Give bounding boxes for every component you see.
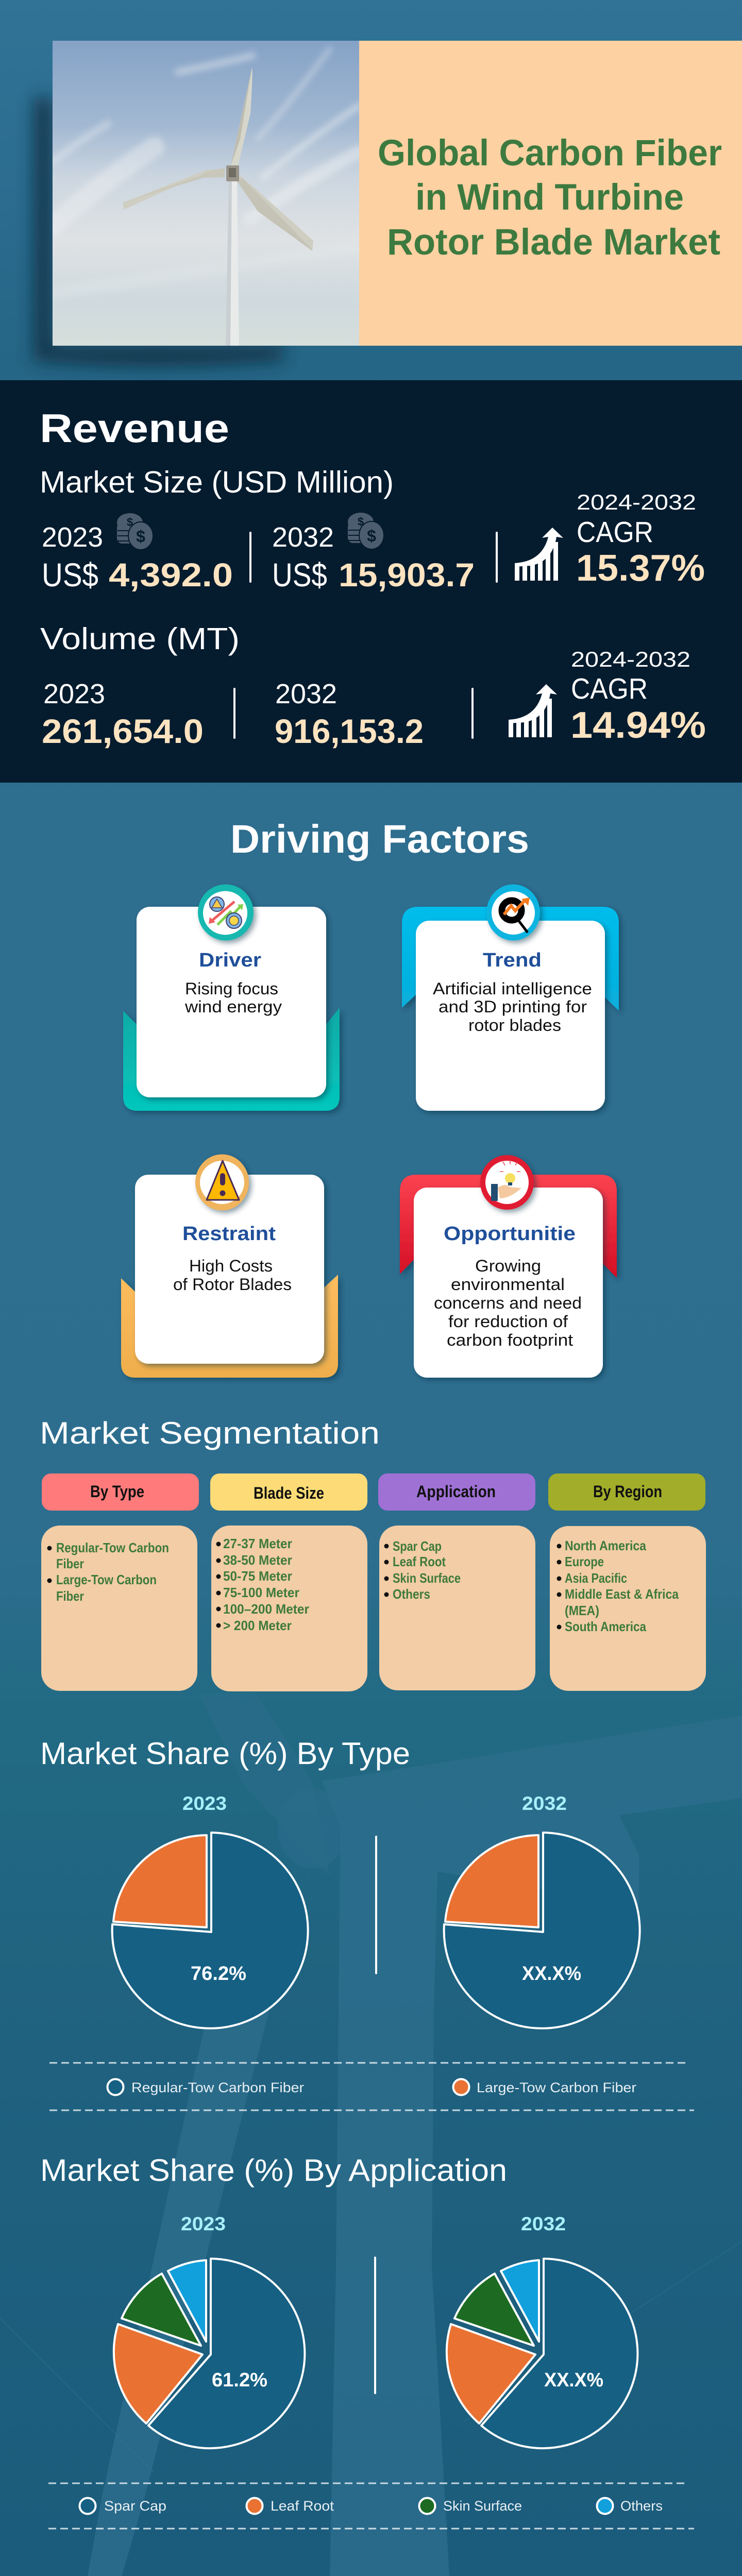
heading: Driving Factors: Driving Factors	[230, 817, 529, 861]
description	[433, 979, 592, 1035]
hero photo: wind turbine against sky	[53, 41, 359, 346]
metric: 2023 market size: US$	[42, 556, 98, 594]
heading: Market Share By Type: Market Share (%) By Type	[40, 1736, 410, 1771]
description: rotor blades	[468, 1016, 561, 1035]
description: carbon footprint	[447, 1331, 573, 1349]
list: region: South America	[565, 1619, 646, 1634]
list: region: Middle East & Africa	[565, 1586, 679, 1602]
segment: Blade Size	[210, 1473, 367, 1691]
label: Opportunitie	[444, 1223, 576, 1245]
description: concerns and need	[434, 1294, 582, 1312]
chart: type share 2023: 76.2%	[191, 1963, 246, 1985]
icon: magnifier with trend arrow	[486, 884, 540, 941]
description: and 3D printing for	[439, 997, 587, 1016]
chart: application share 2023	[114, 2213, 305, 2448]
description: wind energy	[184, 997, 282, 1016]
description: environmental	[451, 1275, 565, 1294]
chart: type share 2032: 2032	[522, 1793, 567, 1814]
list: blade size	[211, 1526, 367, 1691]
card: restraint	[121, 1154, 338, 1378]
heading: Market Size: Market Size (USD Million)	[40, 465, 394, 499]
title: Global Carbon Fiber	[378, 133, 722, 174]
metric: volume CAGR	[570, 647, 706, 746]
icon: growth chart	[515, 528, 563, 581]
description: High Costs	[189, 1257, 273, 1275]
title	[378, 133, 722, 263]
title: Rotor Blade Market	[387, 222, 720, 263]
description	[184, 979, 282, 1016]
list: region	[550, 1526, 706, 1691]
segment: Application	[378, 1473, 535, 1690]
metric: 2032 volume	[275, 679, 424, 750]
metric: revenue CAGR: 2024-2032	[577, 490, 696, 514]
segment: Application: Application	[416, 1482, 496, 1501]
heading: Market Share By Application: Market Share (%) By Application	[40, 2153, 507, 2188]
list: type: Regular-Tow Carbon	[56, 1540, 169, 1555]
icon: coins 2023: $	[136, 527, 145, 546]
metric: volume CAGR: 14.94%	[570, 705, 706, 746]
description: of Rotor Blades	[173, 1275, 292, 1294]
metric: revenue CAGR: CAGR	[577, 516, 653, 549]
list: type: Fiber	[56, 1588, 84, 1604]
list: application: Others	[393, 1586, 430, 1602]
card: trend	[402, 884, 619, 1111]
icon: bulb and hand	[480, 1155, 534, 1210]
icon: coins 2023	[117, 513, 153, 550]
metric: revenue CAGR: 15.37%	[576, 548, 705, 589]
chart: application share 2032: 2032	[521, 2213, 566, 2234]
chart: application share 2023: 2023	[181, 2213, 226, 2234]
list: application: Skin Surface	[393, 1570, 461, 1586]
heading: Revenue: Revenue	[40, 405, 229, 451]
chart: application share 2032: XX.X%	[544, 2369, 603, 2391]
description: Rising focus	[185, 979, 278, 998]
metric: revenue CAGR	[576, 490, 705, 589]
segment: By Region	[548, 1473, 706, 1691]
metric: 2023 volume	[42, 679, 204, 750]
list: region: (MEA)	[565, 1603, 599, 1618]
metric: 2023 market size	[42, 522, 233, 594]
panel: revenue	[0, 380, 742, 783]
icon: driver gears and arrows	[198, 884, 254, 941]
card: opportunities	[400, 1155, 617, 1378]
icon: coins 2032: $	[358, 515, 364, 528]
icon: coins 2032: $	[367, 527, 376, 545]
list: application: Leaf Root	[393, 1554, 446, 1569]
list: type	[41, 1526, 197, 1691]
chart: type share 2032: XX.X%	[522, 1963, 581, 1985]
list: region: Asia Pacific	[565, 1570, 627, 1586]
description	[434, 1257, 582, 1349]
metric: 2032 market size: US$	[272, 556, 327, 594]
list: type: Fiber	[56, 1556, 84, 1571]
icon: growth chart volume	[509, 684, 557, 737]
icon: coins 2032	[348, 513, 384, 549]
legend: type	[107, 2079, 636, 2095]
card: driver	[123, 884, 340, 1111]
list: blade size: 27-37 Meter	[223, 1536, 292, 1551]
segment: By Region: By Region	[593, 1482, 662, 1501]
title panel	[359, 41, 742, 346]
icon: coins 2023: $	[127, 516, 133, 529]
list: application	[379, 1526, 535, 1690]
chart: application share 2023: 61.2%	[212, 2369, 267, 2391]
legend: application: Spar Cap	[104, 2498, 166, 2514]
legend: type: Regular-Tow Carbon Fiber	[131, 2080, 304, 2095]
segment: By Type: By Type	[90, 1482, 144, 1501]
segment: Blade Size: Blade Size	[254, 1484, 324, 1502]
label: Trend	[483, 950, 542, 971]
description: Artificial intelligence	[433, 979, 592, 998]
metric: volume CAGR: CAGR	[571, 672, 648, 705]
metric: 2032 volume: 2032	[275, 679, 337, 709]
description: for reduction of	[448, 1312, 568, 1331]
legend: application: Skin Surface	[443, 2498, 522, 2514]
chart: type share 2032	[444, 1793, 640, 2028]
heading: Market Segmentation: Market Segmentation	[40, 1416, 380, 1450]
chart: application share 2032	[447, 2213, 637, 2448]
list: blade size: > 200 Meter	[223, 1618, 292, 1633]
legend: type: Large-Tow Carbon Fiber	[477, 2080, 636, 2095]
metric: 2023 volume: 2023	[43, 679, 105, 709]
legend: application	[79, 2498, 663, 2514]
metric: 2032 market size: 15,903.7	[339, 556, 475, 594]
metric: 2023 market size: 4,392.0	[109, 556, 233, 594]
list: region: North America	[565, 1538, 646, 1553]
list: type: Large-Tow Carbon	[56, 1572, 157, 1587]
label: Driver	[199, 950, 261, 971]
legend: application: Leaf Root	[271, 2498, 334, 2514]
legend: application: Others	[620, 2498, 663, 2514]
title: in Wind Turbine	[415, 177, 684, 218]
segment: By Type	[41, 1473, 199, 1691]
heading: Volume: Volume (MT)	[40, 622, 240, 656]
metric: 2032 market size: 2032	[272, 522, 334, 553]
description	[173, 1257, 292, 1294]
chart: type share 2023: 2023	[182, 1793, 227, 1814]
list: application: Spar Cap	[393, 1538, 442, 1554]
metric: 2023 market size: 2023	[42, 522, 103, 553]
list: blade size: 38-50 Meter	[223, 1552, 292, 1568]
list: blade size: 50-75 Meter	[223, 1568, 292, 1584]
hero shadow	[34, 98, 286, 366]
icon: warning triangle	[195, 1154, 249, 1211]
turbine	[123, 67, 313, 346]
list: blade size: 75-100 Meter	[223, 1585, 299, 1600]
metric: volume CAGR: 2024-2032	[571, 647, 690, 671]
list: blade size: 100–200 Meter	[223, 1601, 309, 1617]
metric: 2032 market size	[272, 522, 475, 594]
description: Growing	[475, 1257, 541, 1275]
metric: 2032 volume: 916,153.2	[275, 712, 424, 750]
list: region: Europe	[565, 1554, 604, 1569]
metric: 2023 volume: 261,654.0	[42, 712, 204, 750]
label: Restraint	[182, 1223, 276, 1245]
chart: type share 2023	[112, 1793, 308, 2028]
